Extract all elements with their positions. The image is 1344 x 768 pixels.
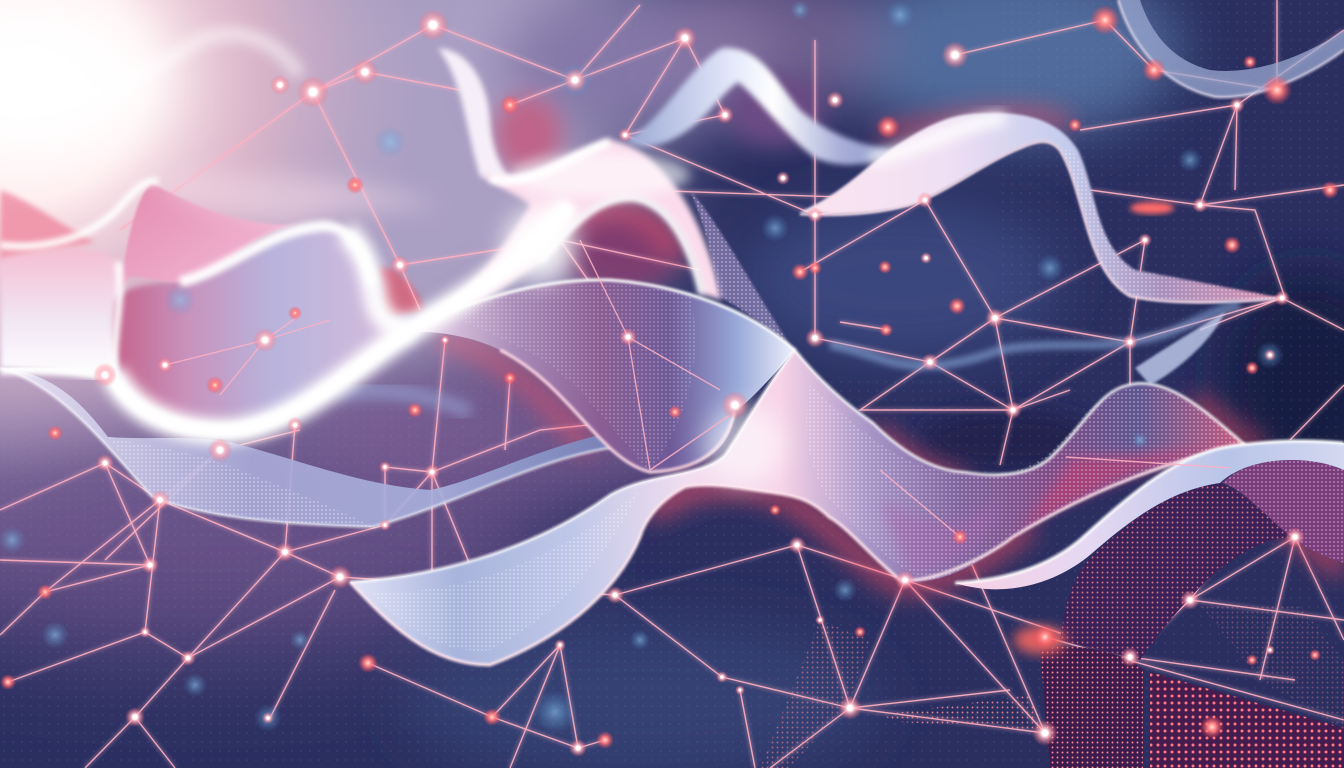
white hot glows (0, 0, 1174, 654)
ribbon: top left wisp (0, 34, 300, 112)
ribbon: right thin strand (830, 305, 1240, 385)
ribbon: main lower wave (350, 350, 1245, 665)
red glow under ribbons (440, 115, 1344, 585)
ribbon: upper peak strand (625, 48, 895, 165)
ribbon: arch and left white strand (438, 48, 790, 345)
network lines over ribbons (165, 240, 1230, 537)
ribbon: top right corner (1118, 0, 1344, 97)
soft mauve shadows behind ribbons (378, 74, 823, 318)
ribbon: right lower wave (955, 441, 1344, 589)
dotted dark ribbon: right lower (1060, 460, 1344, 660)
ribbon: centre mauve fold (405, 280, 795, 472)
ribbon: lower strand from left (0, 368, 630, 527)
dotted mesh: bottom right (760, 605, 1344, 768)
ribbon: left pale block and pink fold (0, 173, 440, 430)
ribbon: loop white lower band (112, 205, 570, 432)
ribbon: upper right band (800, 113, 1282, 302)
